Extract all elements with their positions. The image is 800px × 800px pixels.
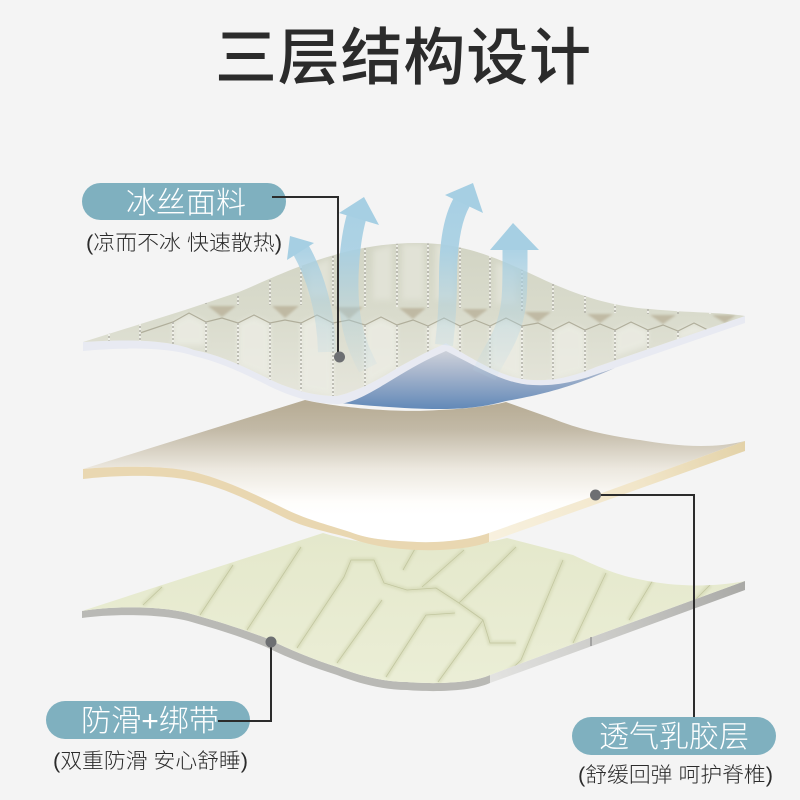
arrow 2 <box>339 197 379 368</box>
layer: anti-slip bottom <box>82 533 745 691</box>
callout line: ice silk <box>272 197 345 362</box>
latex front edge <box>83 467 489 550</box>
pill <box>82 183 286 220</box>
bottom layer grey edge <box>82 607 490 691</box>
sub text: (舒缓回弹 呵护脊椎) <box>578 764 773 787</box>
brown scallops <box>208 306 736 324</box>
vertical stitches highlight <box>109 243 710 396</box>
ice silk quilting <box>109 243 745 396</box>
pill <box>572 717 776 755</box>
ice silk quilted surface <box>83 243 745 396</box>
arrow 4 <box>484 223 539 375</box>
arrow 3 <box>444 183 483 345</box>
sub text: (凉而不冰 快速散热) <box>86 232 282 255</box>
icon: airflow arrows <box>287 183 539 375</box>
bottom layer light edge <box>490 581 745 683</box>
pill text: 冰丝面料 <box>126 187 246 220</box>
label: anti-slip strap <box>46 701 250 773</box>
sub text: (双重防滑 安心舒睡) <box>53 750 248 773</box>
title: 三层结构设计 <box>215 24 591 93</box>
layer: ice silk top <box>83 243 745 409</box>
latex right edge <box>489 441 745 542</box>
bottom layer quilting shadows <box>143 540 710 690</box>
ice silk white edge <box>83 316 745 404</box>
layer: latex middle <box>83 400 745 550</box>
arrow 1 <box>287 236 327 352</box>
callout line: anti-slip <box>218 636 276 721</box>
bottom layer edge tick <box>590 637 592 646</box>
label: ice silk fabric <box>82 183 286 255</box>
latex top surface <box>83 400 745 542</box>
vertical stitches dashes <box>109 243 710 396</box>
label: breathable latex <box>572 717 776 787</box>
light upper columns <box>318 244 502 302</box>
bottom layer quilted surface <box>82 533 745 683</box>
pill <box>46 701 250 739</box>
pill text: 防滑+绑带 <box>81 705 219 738</box>
hex stitch lines <box>140 313 745 333</box>
callout line: latex <box>590 490 694 718</box>
pill text: 透气乳胶层 <box>599 721 749 754</box>
ice silk blue underside <box>330 346 615 409</box>
light hex cells <box>174 315 704 388</box>
